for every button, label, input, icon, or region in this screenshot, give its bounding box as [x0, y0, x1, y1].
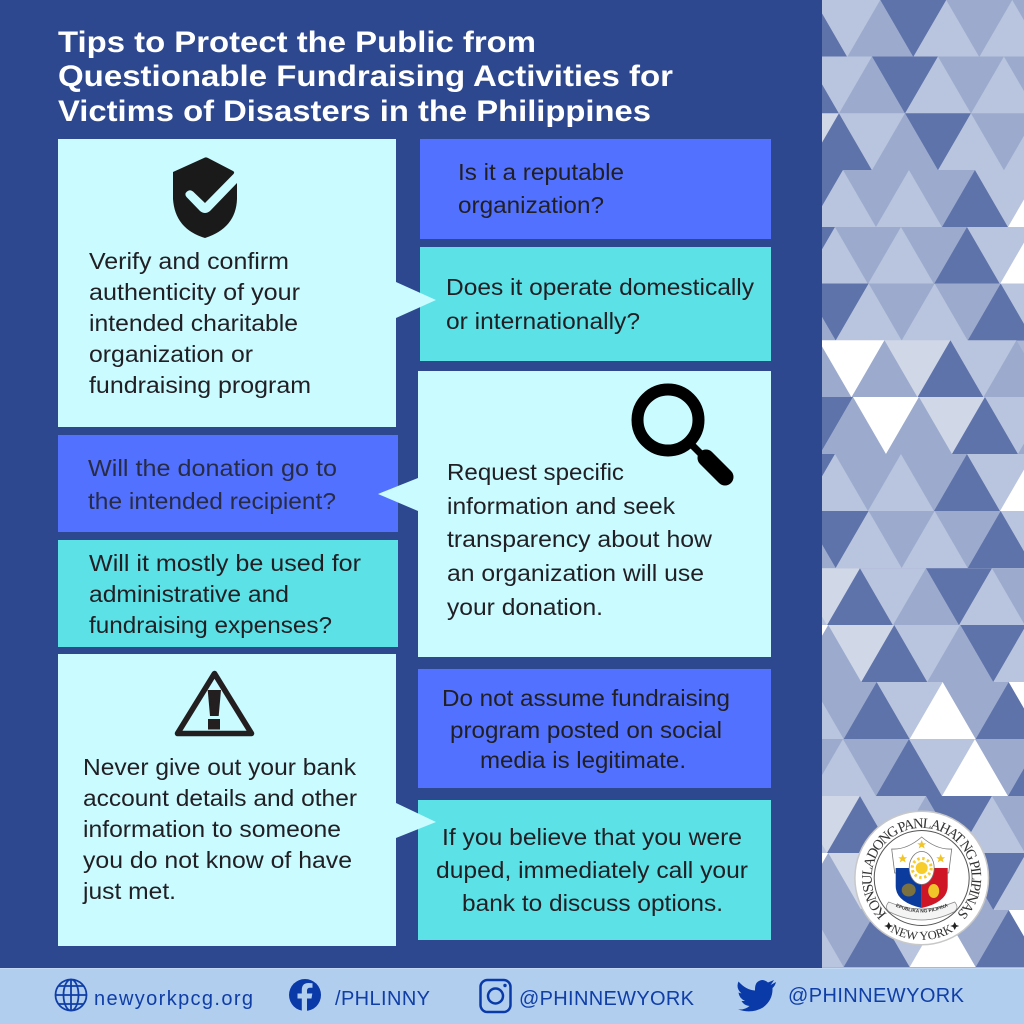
title: Questionable Fundraising Activities for — [58, 60, 673, 93]
icon: shield with check mark — [173, 157, 237, 238]
text: facebook handle: /PHLINNY — [335, 988, 430, 1010]
title — [58, 26, 673, 128]
panel: never give out bank details — [58, 654, 436, 946]
panel: social media warning — [418, 669, 771, 788]
text: instagram handle: @PHINNEWYORK — [519, 988, 695, 1010]
text: never give out your bank details: Never give out your bank — [83, 754, 357, 780]
icon: twitter bird — [738, 980, 776, 1011]
text: never give out your bank details: just met. — [82, 878, 176, 904]
text: request specific information: transparency about how — [447, 526, 712, 552]
text: verify and confirm: authenticity of your — [89, 279, 300, 305]
text: never give out your bank details: account details and other — [83, 785, 357, 811]
panel: reputable organization question: Is it a reputable — [458, 159, 624, 185]
seal: Konsuladong Panlahat ng Pilipinas: NEW YORK — [890, 924, 954, 940]
panel: intended recipient question — [58, 435, 398, 532]
panel: administrative expenses question: administrative and — [89, 581, 289, 607]
panel: social media warning: Do not assume fundraising — [442, 685, 730, 711]
panel: call your bank — [418, 800, 771, 940]
panel: social media warning: program posted on social — [450, 717, 722, 743]
panel: intended recipient question: the intended recipient? — [88, 488, 336, 514]
panel: domestic or international question: or internationally? — [446, 308, 640, 334]
shield — [892, 837, 952, 908]
icon: globe — [56, 980, 86, 1010]
panel: domestic or international question — [420, 247, 771, 361]
panel: call your bank: If you believe that you were — [442, 824, 742, 850]
icon: magnifying glass — [638, 390, 725, 477]
panel: administrative expenses question: fundraising expenses? — [89, 612, 332, 638]
text: request specific information: an organization will use — [447, 560, 704, 586]
panel: request information — [378, 371, 771, 657]
panel: call your bank: bank to discuss options. — [462, 890, 723, 916]
icon: facebook — [289, 979, 321, 1011]
text: website: newyorkpcg.org — [94, 988, 253, 1010]
text: verify and confirm — [89, 248, 311, 398]
seal: Konsuladong Panlahat ng Pilipinas: KONSULADONG PANLAHAT NG PILIPINAS — [862, 818, 982, 920]
panel: administrative expenses question — [58, 540, 398, 647]
text: request specific information: your donation. — [447, 594, 603, 620]
text: verify and confirm: Verify and confirm — [89, 248, 289, 274]
text: twitter handle: @PHINNEWYORK — [788, 985, 965, 1007]
panel: administrative expenses question: Will it mostly be used for — [89, 550, 361, 576]
text: request specific information: information and seek — [447, 493, 676, 519]
panel: reputable organization question: organization? — [458, 192, 604, 218]
text: request specific information — [447, 459, 712, 620]
panel: domestic or international question: Does it operate domestically — [446, 274, 755, 300]
text: never give out your bank details — [82, 754, 357, 904]
panel: intended recipient question: Will the donation go to — [88, 455, 337, 481]
text: verify and confirm: intended charitable — [89, 310, 298, 336]
footer bar — [0, 968, 1024, 1024]
text: never give out your bank details: information to someone — [83, 816, 341, 842]
icon: instagram — [480, 980, 510, 1012]
text: request specific information: Request specific — [447, 459, 624, 485]
panel: social media warning: media is legitimate. — [480, 747, 686, 773]
text: verify and confirm: organization or — [89, 341, 253, 367]
panel: verify authenticity — [58, 139, 436, 427]
text: verify and confirm: fundraising program — [89, 372, 311, 398]
triangle pattern strip — [822, 0, 1024, 968]
icon: warning triangle — [178, 674, 252, 734]
panel: call your bank: duped, immediately call your — [436, 857, 748, 883]
title: Victims of Disasters in the Philippines — [58, 95, 651, 128]
ribbon: Republika ng Pilipinas: REPUBLIKA NG PILIPINAS — [896, 904, 948, 912]
panel: reputable organization question — [420, 139, 771, 239]
title: Tips to Protect the Public from — [58, 26, 536, 59]
text: never give out your bank details: you do not know of have — [83, 847, 352, 873]
